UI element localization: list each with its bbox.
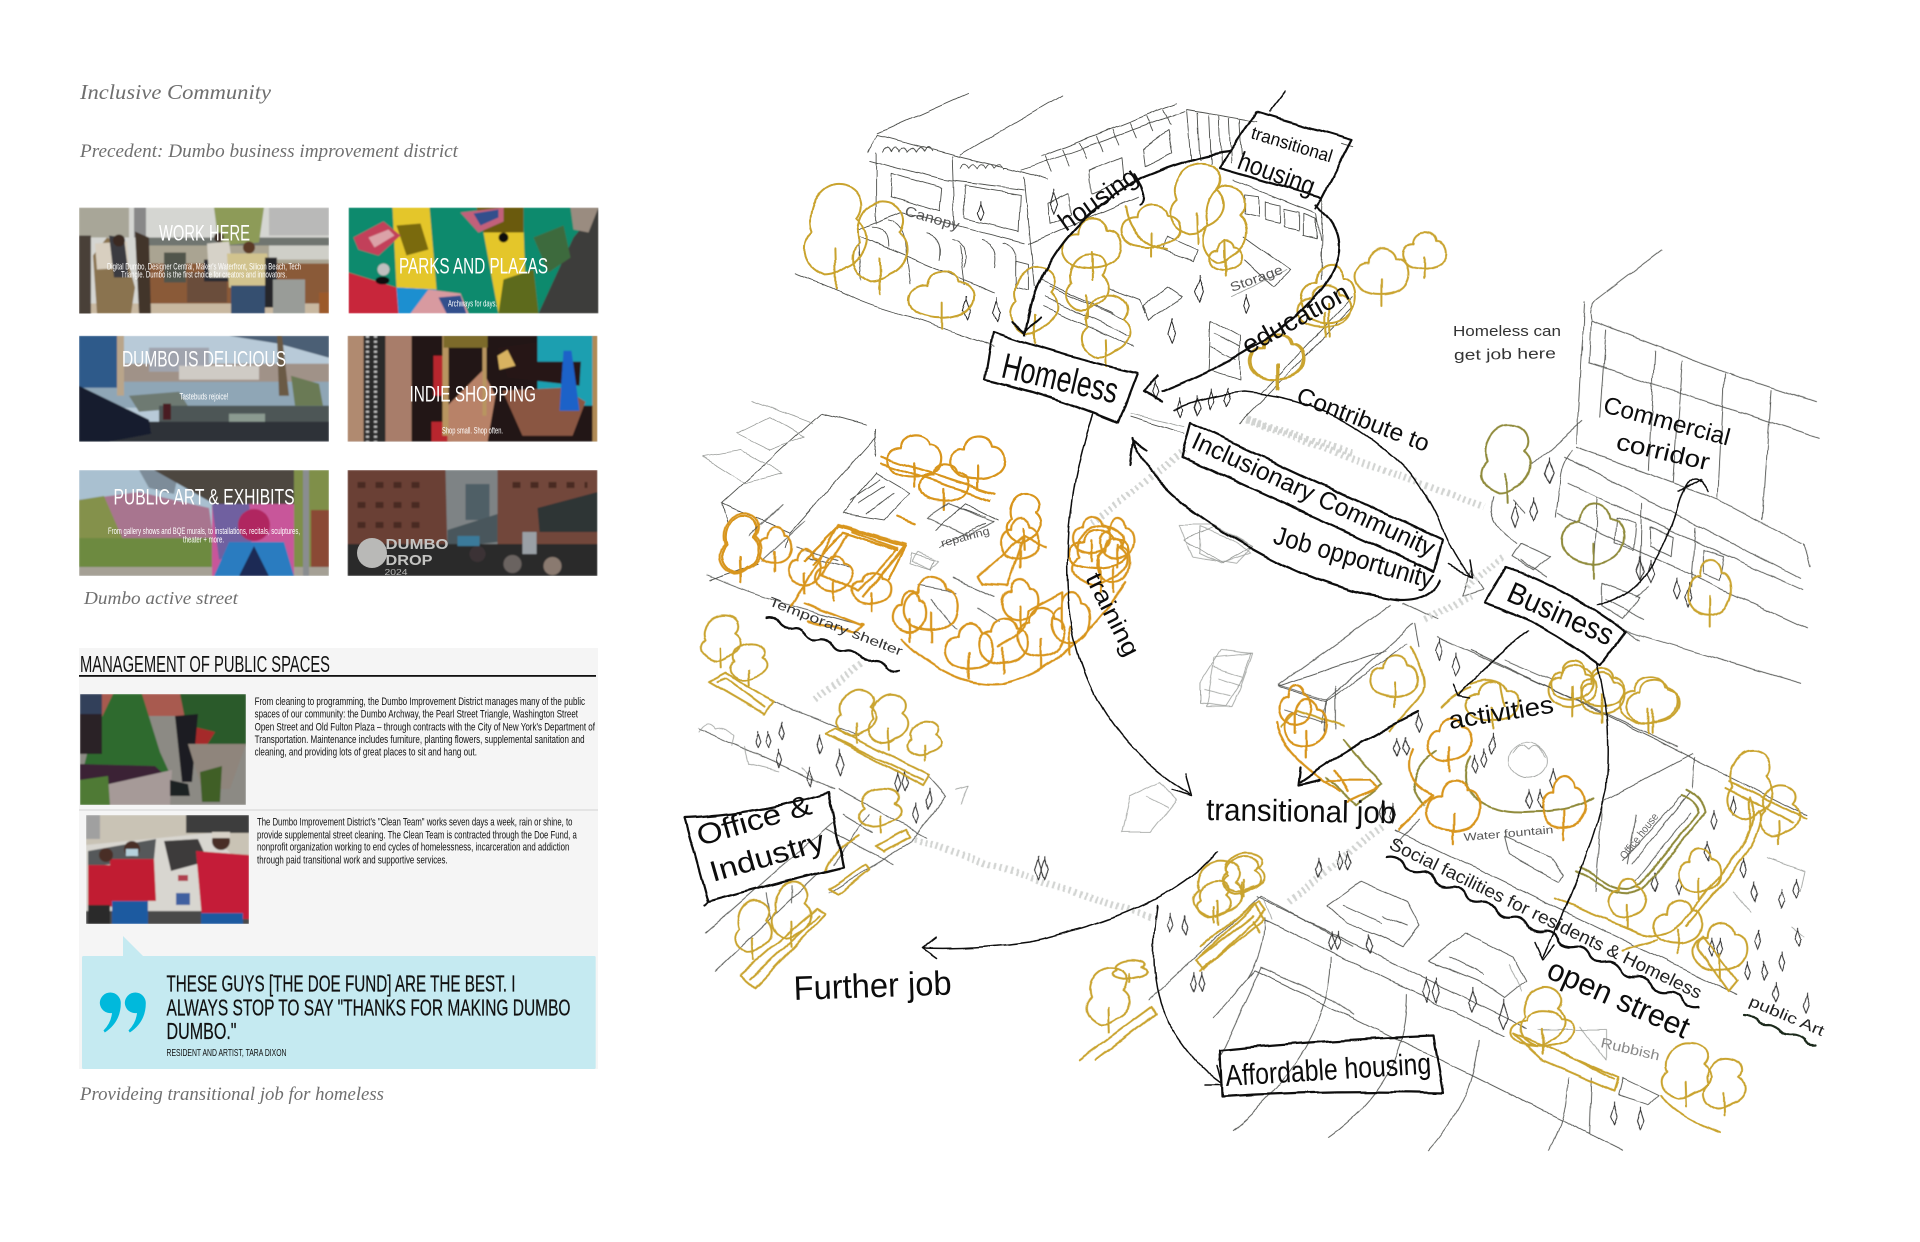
label: public art xyxy=(1744,993,1828,1045)
caption: dumbo active street: Dumbo active street xyxy=(83,588,239,608)
label: transitional job: transitional job xyxy=(1206,792,1396,830)
arrow: business to activities xyxy=(1453,632,1527,697)
text: public art and exhibits: From gallery shows and BQE murals, to installations, recitals, sculptures, xyxy=(108,526,300,537)
text: clean team: through paid transitional work and supportive services. xyxy=(257,854,448,866)
text: dumbo is delicious xyxy=(123,351,286,402)
caption: providing transitional job: Provideing transitional job for homeless xyxy=(79,1085,384,1105)
text: clean team: nonprofit organization working to end cycles of homelessness, incarceration and addiction xyxy=(257,842,569,854)
arrow: inclusionary community to business xyxy=(1174,392,1473,578)
trees: west block courtyard xyxy=(720,514,1133,684)
photo: planters xyxy=(80,694,246,805)
label box: homeless: Homeless xyxy=(998,345,1122,411)
label: storage: Storage xyxy=(1228,262,1285,295)
label: activities: activities xyxy=(1447,691,1556,735)
card: indie shopping xyxy=(348,336,598,442)
sketch: axonometric street drawing xyxy=(685,92,1828,1150)
label: commercial corridor xyxy=(1600,392,1733,476)
text: indie shopping: INDIE SHOPPING xyxy=(410,382,536,407)
text: quote: ALWAYS STOP TO SAY "THANKS FOR MAKING DUMBO xyxy=(166,994,570,1020)
card: public art and exhibits xyxy=(79,470,329,576)
arrow: business to commercial corridor xyxy=(1597,478,1708,605)
arrow: activities to transitional job xyxy=(1298,712,1418,785)
label box: transitional housing: transitional xyxy=(1249,123,1335,166)
panel: active street photo cards xyxy=(79,208,598,577)
sketch linework xyxy=(698,94,1820,1150)
label box: transitional housing: housing xyxy=(1234,145,1319,201)
text: public art and exhibits: PUBLIC ART & EXHIBITS xyxy=(114,485,294,510)
label: office house: Office house xyxy=(1618,811,1661,862)
label: open street: open street xyxy=(1542,951,1696,1045)
label: contribute to: Contribute to xyxy=(1293,382,1433,458)
fountain plaza planting xyxy=(1327,740,1705,893)
label: temporary shelter xyxy=(766,594,906,671)
label box: office and industry: Industry xyxy=(706,825,829,889)
sketch quadrant: south west block xyxy=(698,504,1353,1060)
label: temporary shelter: Temporary shelter xyxy=(767,594,906,659)
label box: homeless xyxy=(985,332,1137,423)
arrow: transitional housing to education xyxy=(1143,205,1339,402)
card: dumbo drop xyxy=(348,470,598,577)
label box: affordable housing xyxy=(1220,1036,1443,1097)
logo: dumbo drop xyxy=(357,538,448,575)
label: canopy: Canopy xyxy=(903,203,961,233)
label box: office and industry xyxy=(685,789,843,905)
sketch quadrant: commercial corridor xyxy=(1200,232,1820,747)
sketch: west block building xyxy=(703,400,1353,580)
text: parks and plazas: PARKS AND PLAZAS xyxy=(399,254,548,278)
text: work here: Digital Dumbo, Designer Central, Maker's Waterfront, Silicon Beach, Tech xyxy=(107,262,301,272)
text: quote: THESE GUYS [THE DOE FUND] ARE THE BEST. I xyxy=(166,970,516,996)
text: work here: WORK HERE xyxy=(159,220,250,246)
arrow: transitional housing to homeless xyxy=(1012,152,1229,335)
arrow: homeless to transitional job training xyxy=(1068,415,1192,796)
note: homeless can get job here: get job here xyxy=(1454,345,1556,364)
arrow: transitional job to further job xyxy=(923,851,1218,958)
label: rubbish: Rubbish xyxy=(1599,1034,1661,1063)
photo: clean team xyxy=(86,815,249,924)
label: public art: public Art xyxy=(1746,993,1828,1040)
text: work here: Triangle. Dumbo is the first choice for creators and innovators. xyxy=(121,270,287,280)
arrow: business to open street xyxy=(1535,663,1608,960)
trees: corridor xyxy=(1482,425,1624,578)
label: commercial corridor: corridor xyxy=(1614,429,1712,476)
sketch quadrant: south east plaza xyxy=(1197,643,1810,1150)
subtitle: precedent: Precedent: Dumbo business improvement district xyxy=(79,142,459,162)
arrow: transitional job to affordable housing xyxy=(1153,905,1222,1085)
heading: MANAGEMENT OF PUBLIC SPACES xyxy=(80,651,330,677)
text: management intro: From cleaning to programming, the Dumbo Improvement District manages many of the public xyxy=(255,696,585,708)
text: management intro: Open Street and Old Fulton Plaza – through contracts with the City of New York's Department of xyxy=(255,721,596,733)
text: clean team xyxy=(257,817,577,866)
text: parks and plazas xyxy=(400,258,548,308)
label box: inclusionary community and job opportunity: Inclusionary Community xyxy=(1188,427,1440,563)
trees: office strip xyxy=(702,616,1266,1060)
text: work here xyxy=(107,220,301,280)
logo: dumbo drop: DUMBO xyxy=(386,536,449,553)
panel: management of public spaces xyxy=(79,648,598,1069)
label box: business: Business xyxy=(1502,576,1619,652)
logo: dumbo drop: DROP xyxy=(386,552,432,569)
text: indie shopping: Shop small. Shop often. xyxy=(442,426,503,437)
label box: inclusionary community and job opportunity: Job opportunity xyxy=(1270,520,1437,594)
text: public art and exhibits: theater + more. xyxy=(183,534,224,546)
label box: office and industry: Office & xyxy=(693,789,815,853)
sketch quadrant: north west block xyxy=(703,94,1356,580)
note: homeless can get job here: Homeless can xyxy=(1453,323,1561,340)
label: commercial corridor: Commercial xyxy=(1600,392,1733,451)
label: education: education xyxy=(1236,277,1354,360)
text: clean team: The Dumbo Improvement District's "Clean Team" works seven days a week, rain or shine, to xyxy=(257,817,572,829)
text: dumbo is delicious: Tastebuds rejoice! xyxy=(180,392,228,403)
arrow: transitional housing top line xyxy=(1270,92,1285,112)
card: dumbo is delicious xyxy=(79,336,329,442)
icon: quotation mark xyxy=(100,992,146,1032)
text: management intro: cleaning, and providing lots of great places to sit and hang out. xyxy=(255,747,477,759)
label: water fountain: Water fountain xyxy=(1463,824,1554,844)
note: homeless can get job here xyxy=(1453,323,1561,364)
logo: dumbo drop: 2024 xyxy=(384,568,408,577)
text: management intro xyxy=(255,696,596,759)
text: parks and plazas: Archways for days. xyxy=(448,298,497,310)
arrow: job opportunity to homeless xyxy=(1130,438,1440,600)
text: quote xyxy=(166,970,570,1059)
label box: affordable housing: Affordable housing xyxy=(1224,1047,1432,1093)
label: further job: Further job xyxy=(793,965,952,1008)
card: parks and plazas xyxy=(348,208,598,314)
callout: quote xyxy=(82,936,596,1069)
text: dumbo is delicious: DUMBO IS DELICIOUS xyxy=(122,347,286,372)
text: management intro: Transportation. Maintenance includes furniture, planting flowers, supplemental sanitation and xyxy=(255,734,585,746)
trees: plaza edge xyxy=(805,163,1356,390)
trees: west block xyxy=(722,435,1128,580)
label: training: training xyxy=(1080,568,1145,661)
text: quote: RESIDENT AND ARTIST, TARA DIXON xyxy=(166,1047,286,1059)
label: social facilities: Social facilities for residents & Homeless xyxy=(1386,834,1705,1003)
text: public art and exhibits xyxy=(108,489,300,542)
text: quote: DUMBO." xyxy=(166,1018,236,1044)
text: indie shopping xyxy=(410,386,535,436)
text: clean team: provide supplemental street cleaning. The Clean Team is contracted through the Doe Fund, a xyxy=(257,829,577,841)
label: housing: housing xyxy=(1052,161,1143,237)
title: Inclusive Community xyxy=(79,80,272,104)
text: management intro: spaces of our community: the Dumbo Archway, the Pearl Street Triangle, Washington Street xyxy=(255,709,579,721)
card: work here xyxy=(79,208,329,314)
label box: transitional housing xyxy=(1219,112,1352,208)
label: repairing: repairing xyxy=(940,525,991,550)
